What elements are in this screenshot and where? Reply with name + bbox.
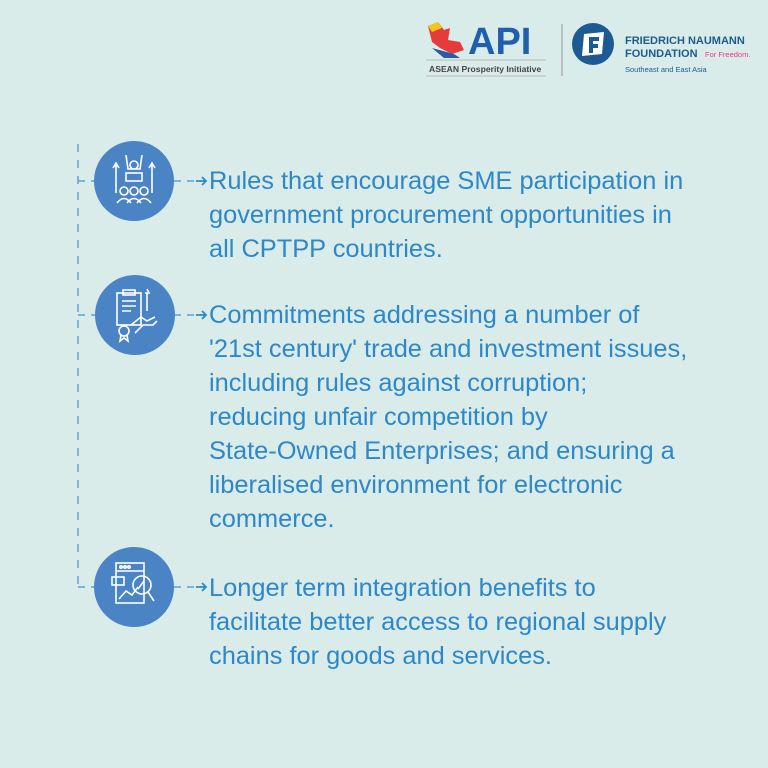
icon: handshake commitments bbox=[95, 275, 175, 355]
text: integration benefits: Longer term integration benefits to bbox=[209, 574, 596, 602]
logo: API: API bbox=[468, 21, 531, 63]
text: commitments: Commitments addressing a number of bbox=[209, 301, 639, 329]
text: SME rules bbox=[209, 167, 683, 263]
text: integration benefits bbox=[209, 574, 666, 670]
logo: API bbox=[426, 21, 546, 76]
text: commitments: commerce. bbox=[209, 505, 335, 533]
logo: Friedrich Naumann Foundation bbox=[562, 23, 750, 76]
text: SME rules: all CPTPP countries. bbox=[209, 235, 443, 263]
text: commitments: '21st century' trade and investment issues, bbox=[209, 335, 687, 363]
logo: Friedrich Naumann Foundation: FOUNDATION bbox=[625, 48, 698, 60]
logo: Friedrich Naumann Foundation: For Freedom. bbox=[705, 50, 750, 59]
text: commitments: liberalised environment for electronic bbox=[209, 471, 623, 499]
text: SME rules: government procurement opportunities in bbox=[209, 201, 672, 229]
icon: supply chain analytics bbox=[94, 547, 174, 627]
timeline connector bbox=[77, 144, 208, 592]
text: commitments: reducing unfair competition by bbox=[209, 403, 548, 431]
text: integration benefits: facilitate better access to regional supply bbox=[209, 608, 666, 636]
icon: SME participation bbox=[94, 141, 174, 221]
logo: Friedrich Naumann Foundation: FRIEDRICH NAUMANN bbox=[625, 35, 745, 47]
text: commitments bbox=[209, 301, 687, 533]
text: SME rules: Rules that encourage SME participation in bbox=[209, 167, 683, 195]
logo: Friedrich Naumann Foundation: Southeast and East Asia bbox=[625, 65, 708, 74]
logo: API: ASEAN Prosperity Initiative bbox=[429, 64, 541, 74]
text: commitments: including rules against corruption; bbox=[209, 369, 587, 397]
text: commitments: State-Owned Enterprises; and ensuring a bbox=[209, 437, 675, 465]
text: integration benefits: chains for goods and services. bbox=[209, 642, 552, 670]
